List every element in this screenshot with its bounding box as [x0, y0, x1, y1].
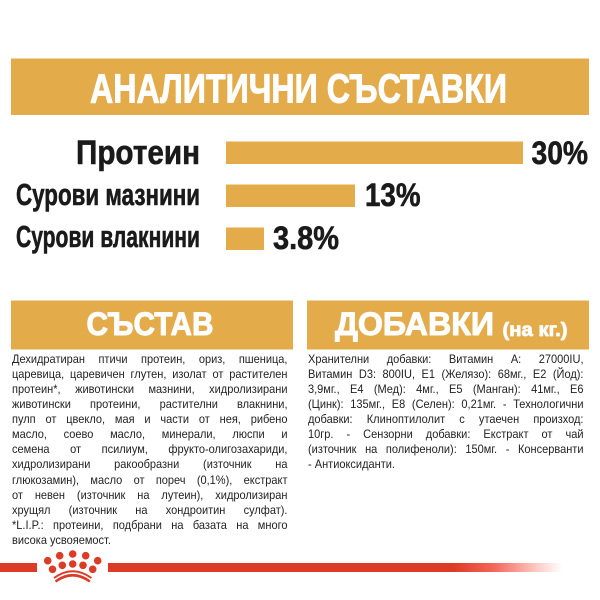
panel: additives banner: [307, 300, 589, 350]
text block: additives: Хранителни добавки: Витамин A: 27000IU,: [308, 352, 583, 366]
panel: composition banner: [11, 300, 293, 350]
text block: composition: глюкозамин), масло от пореч (0,1%), екстракт: [12, 474, 287, 486]
bar chart: analytical constituents: [16, 134, 588, 256]
text block: composition: Дехидратиран птичи протеин, ориз, пшеница,: [12, 352, 287, 366]
text block: composition: протеин*, животински мазнини, хидролизирани: [12, 383, 287, 396]
text block: additives: Витамин D3: 800IU, E1 (Желязо): 68мг., E2 (Йод):: [308, 368, 583, 381]
row: protein: [76, 134, 588, 172]
row: crude fat: 13%: [365, 177, 420, 213]
heading note: per kg: (на кг.): [502, 320, 568, 341]
text block: composition: *L.I.P.: протеини, подбрани на базата на много: [12, 519, 287, 532]
panel: analytical constituents banner: [11, 58, 589, 115]
text block: composition: висока усвояемост.: [12, 534, 110, 547]
text block: composition: хрущял (източник на хондроитин сулфат).: [12, 504, 287, 517]
text block: composition: хидролизирани ракообразни (източник на: [12, 458, 287, 471]
text block: composition: семена от псилиум, фрукто-олигозахариди,: [12, 443, 287, 456]
footer rule: right red bar fading out: [108, 563, 562, 572]
row: crude fat: [16, 177, 420, 213]
row: protein: 30%: [532, 135, 588, 171]
text block: composition: [12, 352, 288, 547]
text block: additives: (Цинк): 135мг., E8 (Селен): 0,21мг. - Технологични: [308, 398, 583, 411]
heading: composition: СЪСТАВ: [86, 306, 214, 342]
row: protein: Протеин: [76, 134, 200, 172]
text block: additives: 3,9мг., E4 (Мед): 4мг., E5 (Манган): 41мг., E6: [308, 383, 583, 396]
row: crude fibre: Сурови влакнини: [16, 219, 200, 254]
row: crude fibre: 3.8%: [273, 220, 339, 256]
text block: additives: (източник на полифеноли): 150мг. - Консерванти: [308, 443, 583, 456]
text block: composition: от невен (източник на лутеин), хидролизиран: [12, 489, 287, 502]
row: crude fat: Сурови мазнини: [16, 177, 200, 212]
icon: royal crown: [44, 550, 101, 582]
text block: additives: 10гр. - Сензорни добавки: Екстракт от чай: [308, 428, 583, 441]
text block: additives: [308, 352, 583, 471]
heading: additives: ДОБАВКИ: [335, 306, 494, 342]
text block: composition: царевица, царевичен глутен, изолат от растителен: [12, 368, 287, 381]
text block: composition: пулп от цвекло, мая и части от нея, рибено: [12, 413, 287, 426]
text block: composition: животински протеини, растителни влакнини,: [12, 398, 287, 411]
text block: additives: добавки: Клиноптилолит с утаечен произход:: [308, 413, 583, 426]
text block: additives: - Антиоксиданти.: [308, 458, 394, 471]
footer rule: left red bar: [0, 563, 37, 572]
text block: composition: масло, соево масло, минерали, люспи и: [12, 428, 287, 441]
